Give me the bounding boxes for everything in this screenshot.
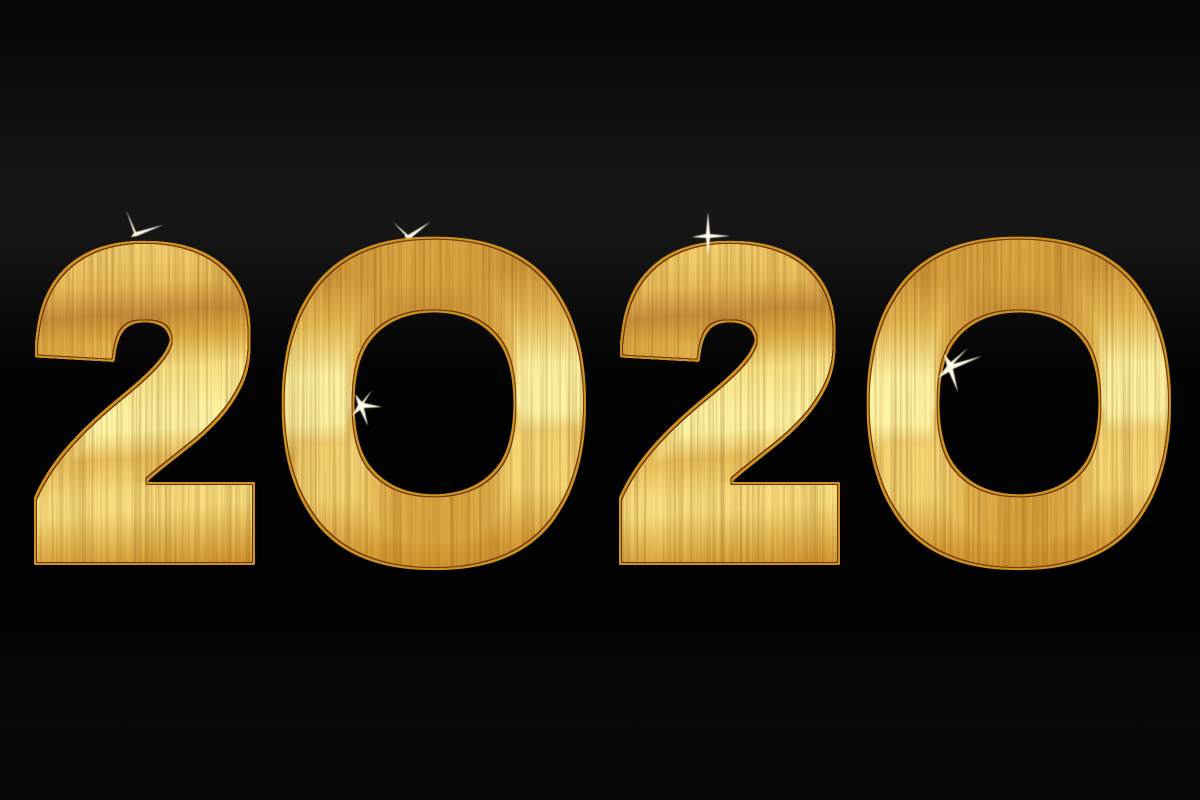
digit: first 0: 0 (252, 189, 616, 632)
sparkle: first 2 (126, 210, 163, 237)
sparkle: first 0 (393, 222, 430, 238)
digit: second 2: 2 (616, 175, 845, 635)
digit: first 2: 2 (31, 175, 260, 635)
digit: second 0: 0 (837, 189, 1200, 632)
sparkle: first 0 counter (352, 390, 382, 426)
sparkle: second 2 (692, 212, 730, 256)
sparkle: second 0 counter (938, 348, 982, 392)
